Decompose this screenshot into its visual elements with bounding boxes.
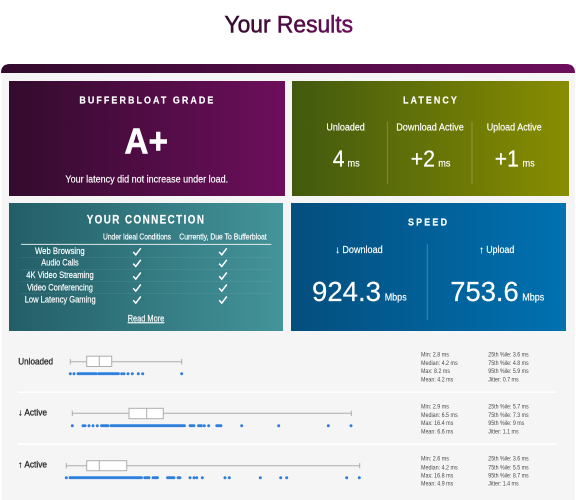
metric: download [312, 245, 407, 307]
dot strip: download active [71, 424, 353, 427]
metric: download: ↓ Download [335, 245, 383, 256]
heading: speed: SPEED [408, 217, 447, 229]
dot strip: unloaded [69, 372, 183, 375]
box plot: unloaded [70, 356, 182, 366]
dot strip: upload active [65, 476, 361, 479]
statistics: download active: Median: 6.5 ms [421, 413, 458, 419]
label: upload active: ↑ Active [18, 460, 47, 470]
metric: download: 924.3 [312, 276, 381, 307]
metric: upload: Mbps [522, 293, 544, 304]
panel: bufferbloat grade [9, 81, 285, 196]
row labels: 4K Video Streaming [26, 270, 94, 281]
box plot: upload active [66, 461, 360, 471]
metric: unloaded [326, 123, 365, 172]
statistics: upload active: Mean: 4.9 ms [421, 482, 453, 488]
statistics: upload active: 25th %ile: 3.6 ms [488, 457, 529, 463]
statistics: upload active [421, 457, 529, 488]
statistics: download active: 25th %ile: 5.7 ms [488, 405, 529, 411]
metric: upload: 753.6 [450, 276, 519, 307]
metric: upload [450, 245, 544, 307]
statistics: download active: Max: 16.4 ms [421, 421, 453, 427]
metric: download active: Download Active [396, 123, 464, 134]
statistics: unloaded: 25th %ile: 3.6 ms [488, 353, 529, 359]
row labels: Web Browsing [35, 246, 85, 257]
statistics: upload active: 75th %ile: 5.5 ms [488, 465, 529, 471]
statistics: unloaded: 75th %ile: 4.8 ms [488, 361, 529, 367]
top gradient bar [1, 64, 575, 73]
statistics: unloaded: Mean: 4.2 ms [421, 377, 453, 383]
row: unloaded [18, 353, 529, 383]
row labels: Low Latency Gaming [25, 295, 96, 306]
icons: checkmarks current [219, 248, 227, 303]
metric: upload active: Upload Active [487, 123, 542, 134]
label: unloaded: Unloaded [18, 356, 53, 366]
metric: download active: ms [438, 159, 450, 170]
statistics: unloaded: Median: 4.2 ms [421, 361, 458, 367]
statistics: upload active: Median: 4.2 ms [421, 465, 458, 471]
metric: download active: +2 [411, 146, 435, 172]
statistics: download active: Mean: 6.6 ms [421, 430, 453, 436]
statistics: download active: 95th %ile: 9 ms [488, 421, 524, 427]
row labels: Video Conferencing [27, 283, 93, 294]
panel: your connection [9, 203, 283, 331]
row: download active [18, 405, 529, 436]
statistics: upload active: 95th %ile: 8.7 ms [488, 473, 529, 479]
statistics: upload active: Max: 16.8 ms [421, 473, 453, 479]
statistics: unloaded: 95th %ile: 5.9 ms [488, 369, 529, 375]
statistics: unloaded: Min: 2.8 ms [421, 353, 449, 359]
row labels: Audio Calls [41, 258, 79, 269]
statistics: download active: 75th %ile: 7.3 ms [488, 413, 529, 419]
heading: your connection: YOUR CONNECTION [87, 213, 204, 227]
metric: download active [396, 123, 464, 172]
box plot: download active [72, 408, 351, 419]
panel: latency [292, 81, 569, 196]
statistics: download active [421, 405, 529, 436]
metric: upload active: +1 [495, 146, 519, 172]
metric: unloaded: Unloaded [326, 123, 365, 134]
statistics: upload active: Min: 2.6 ms [421, 457, 449, 463]
metric: upload active [487, 123, 542, 172]
grade value: A+ [124, 120, 168, 161]
column headers: Currently, Due To Bufferbloat [179, 231, 267, 241]
metric: upload active: ms [522, 159, 535, 170]
metric: upload: ↑ Upload [479, 245, 514, 256]
statistics: download active: Min: 2.9 ms [421, 405, 449, 411]
statistics: download active: Jitter: 1.1 ms [488, 430, 519, 436]
read more link: Read More [128, 313, 164, 324]
grade description: Your latency did not increase under load. [65, 174, 228, 186]
statistics: unloaded [421, 353, 529, 383]
heading: latency: LATENCY [403, 95, 457, 107]
row labels [25, 246, 96, 306]
column headers [103, 231, 267, 241]
statistics: unloaded: Jitter: 0.7 ms [488, 377, 519, 383]
metric: unloaded: ms [348, 159, 360, 170]
statistics: upload active: Jitter: 1.4 ms [488, 482, 519, 488]
label: download active: ↓ Active [18, 407, 47, 417]
title: Your Results [224, 12, 353, 38]
metric: unloaded: 4 [333, 146, 345, 172]
heading: bufferbloat grade: BUFFERBLOAT GRADE [79, 95, 214, 107]
column headers: Under Ideal Conditions [103, 231, 171, 241]
statistics: unloaded: Max: 8.2 ms [421, 369, 450, 375]
panel: speed [291, 203, 566, 331]
icons: checkmarks ideal conditions [133, 248, 141, 303]
metric: download: Mbps [385, 293, 407, 304]
row: upload active [18, 457, 529, 488]
